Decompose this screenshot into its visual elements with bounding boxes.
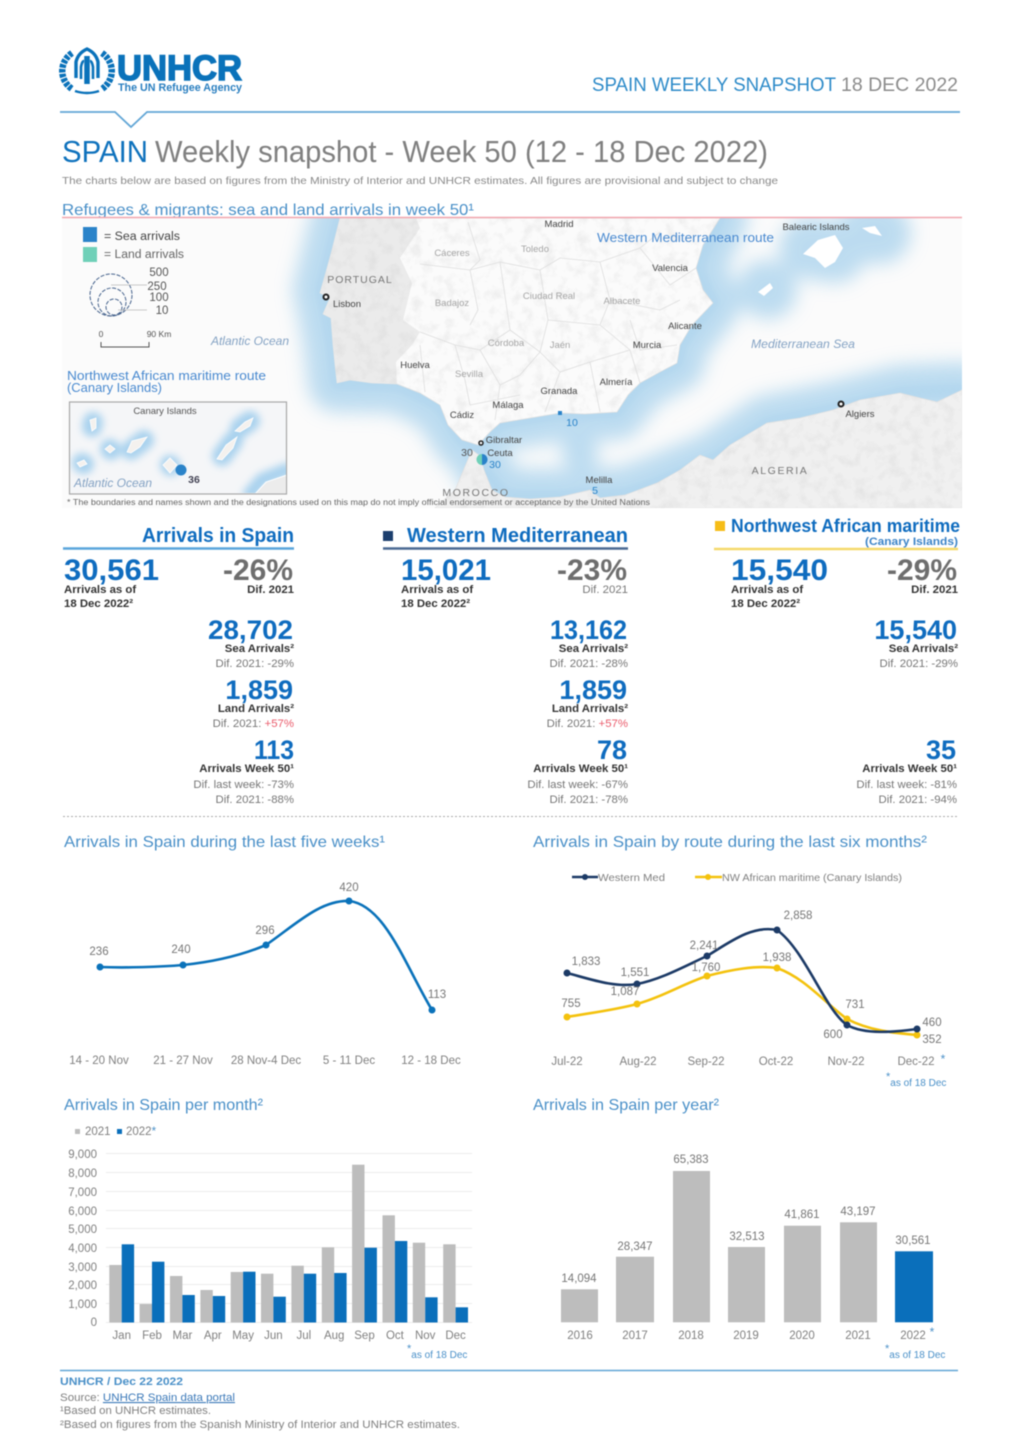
panel: map: 30 xyxy=(461,447,473,459)
panel: western mediterranean: Dif. 2021: -78% xyxy=(549,794,628,806)
panel: map: Badajoz xyxy=(435,298,469,309)
panel: map: Málaga xyxy=(492,400,524,411)
legend: circle sizes: 100 xyxy=(149,292,169,304)
line: NW African xyxy=(564,964,920,1038)
map scale: 0 xyxy=(99,329,104,339)
chart: by route last six months: 2,241 xyxy=(690,940,718,952)
inset: Canary Islands: Atlantic Ocean xyxy=(73,476,152,490)
x axis: Feb xyxy=(142,1330,162,1342)
panel: northwest african maritime: Arrivals as of xyxy=(731,584,803,596)
panel: western mediterranean: Dif. last week: -67% xyxy=(527,779,628,791)
heading: Arrivals in Spain per year² xyxy=(533,1097,720,1114)
panel: arrivals in Spain: Dif. 2021: -88% xyxy=(215,794,294,806)
chart: last five weeks: 5 - 11 Dec xyxy=(323,1055,375,1067)
line xyxy=(96,898,436,1014)
panel: map: Ciudad Real xyxy=(523,291,575,302)
panel: arrivals in Spain: 1,859 xyxy=(225,675,293,705)
chart: last five weeks: 240 xyxy=(171,944,191,956)
province borders xyxy=(420,222,696,420)
panel: northwest african maritime: Arrivals Week 50¹ xyxy=(862,763,957,775)
chart: by route last six months: Dec-22 xyxy=(897,1056,935,1068)
chart: by route last six months: 600 xyxy=(823,1029,843,1041)
footer: Source: UNHCR Spain data portal xyxy=(60,1392,235,1404)
header date line: 18 DEC 2022 xyxy=(841,74,958,96)
y axis: 6,000 xyxy=(68,1206,97,1218)
legend: circle sizes: 10 xyxy=(156,305,168,317)
panel: map xyxy=(62,218,962,508)
panel: northwest african maritime: Northwest African maritime xyxy=(731,516,960,536)
chart: last five weeks: 296 xyxy=(255,925,275,937)
header date line: SPAIN WEEKLY SNAPSHOT xyxy=(592,74,836,96)
chart: last five weeks: 12 - 18 Dec xyxy=(401,1055,461,1067)
panel: northwest african maritime: Dif. 2021: -29% xyxy=(879,658,958,670)
x axis: 2019 xyxy=(733,1330,759,1342)
map top rule xyxy=(62,216,962,218)
chart: by route last six months: 460 xyxy=(922,1017,942,1029)
panel: map: PORTUGAL xyxy=(327,274,393,286)
heading: Arrivals in Spain per month² xyxy=(64,1097,264,1114)
note: as of 18 Dec xyxy=(890,1078,946,1089)
panel: map: Toledo xyxy=(521,244,549,255)
panel: arrivals in Spain: 18 Dec 2022² xyxy=(64,598,133,610)
x axis: 2018 xyxy=(678,1330,704,1342)
x axis: Oct xyxy=(386,1330,405,1342)
x axis: 2016 xyxy=(567,1330,593,1342)
panel: western mediterranean: 1,859 xyxy=(559,675,627,705)
chart: by route last six months: Oct-22 xyxy=(759,1056,793,1068)
panel: map: Córdoba xyxy=(488,338,525,349)
chart: last five weeks: 21 - 27 Nov xyxy=(153,1055,213,1067)
legend: NW African maritime (Canary Islands) xyxy=(722,873,902,884)
chart: last five weeks: 28 Nov-4 Dec xyxy=(231,1055,301,1067)
y axis: 5,000 xyxy=(68,1224,97,1236)
panel: western mediterranean: -23% xyxy=(557,554,627,587)
panel: western mediterranean xyxy=(383,525,628,806)
heading: map section: Refugees & migrants: sea and land arrivals in week 50¹ xyxy=(62,202,474,219)
y axis xyxy=(68,1149,97,1329)
x axis: Jun xyxy=(264,1330,283,1342)
gridlines xyxy=(106,1154,472,1322)
panel: map: Almería xyxy=(600,377,633,388)
panel: map: MOROCCO xyxy=(442,487,510,499)
chart: last five weeks: 113 xyxy=(428,989,446,1001)
note: * xyxy=(885,1343,890,1355)
route label: northwest african xyxy=(67,369,266,395)
chart: by route last six months: 2,858 xyxy=(784,910,812,922)
panel: map: Valencia xyxy=(652,263,689,274)
land: Portugal xyxy=(320,218,420,384)
chart: last five weeks: 14 - 20 Nov xyxy=(69,1055,129,1067)
footer: ¹Based on UNHCR estimates. xyxy=(60,1405,211,1417)
note: * xyxy=(886,1071,891,1083)
panel: western mediterranean: Arrivals Week 50¹ xyxy=(533,763,628,775)
note: as of 18 Dec xyxy=(411,1350,467,1361)
y axis: 2,000 xyxy=(68,1280,97,1292)
x axis: 2020 xyxy=(789,1330,815,1342)
chart: by route last six months: Sep-22 xyxy=(687,1056,725,1068)
inset: Canary Islands: 36 xyxy=(188,474,200,486)
panel: map: Algiers xyxy=(845,409,875,420)
y axis: 4,000 xyxy=(68,1243,97,1255)
y axis: 7,000 xyxy=(68,1187,97,1199)
x axis xyxy=(112,1330,466,1342)
panel: map: 30 xyxy=(489,459,501,471)
panel: western mediterranean: Land Arrivals² xyxy=(552,703,628,715)
legend xyxy=(75,1126,157,1138)
x axis: Apr xyxy=(204,1330,222,1342)
x axis: Sep xyxy=(354,1330,375,1342)
chart: by route last six months: 1,551 xyxy=(621,967,649,979)
values: 41,861 xyxy=(784,1209,820,1221)
x axis: Nov xyxy=(415,1330,436,1342)
values: 14,094 xyxy=(561,1273,597,1285)
inset: Canary Islands xyxy=(70,402,287,494)
x axis: 2017 xyxy=(622,1330,648,1342)
legend xyxy=(572,873,902,884)
panel: arrivals in Spain: Dif. 2021: +57% xyxy=(213,718,294,730)
x axis: Jan xyxy=(112,1330,131,1342)
panel: northwest african maritime: 18 Dec 2022² xyxy=(731,598,800,610)
x axis xyxy=(567,1325,935,1342)
chart: last five weeks: 236 xyxy=(89,946,109,958)
icon: yellow square xyxy=(715,521,725,531)
chart: per month xyxy=(64,1097,472,1361)
panel: western mediterranean: 18 Dec 2022² xyxy=(401,598,470,610)
route label: northwest african: Northwest African maritime route xyxy=(67,369,266,383)
panel: arrivals in Spain: Arrivals in Spain xyxy=(142,525,294,547)
panel: map: 10 xyxy=(566,417,578,429)
panel: map: ALGERIA xyxy=(752,465,808,477)
panel: map: Jaén xyxy=(550,340,570,351)
panel: map: Cádiz xyxy=(450,410,474,421)
y axis: 0 xyxy=(91,1317,97,1329)
chart: last five weeks: 420 xyxy=(339,882,359,894)
legend: circle sizes xyxy=(90,267,169,317)
x axis: 2022 xyxy=(900,1330,926,1342)
chart: by route last six months: 1,938 xyxy=(763,952,791,964)
panel: northwest african maritime: Sea Arrivals² xyxy=(889,643,958,655)
legend: circle sizes: 250 xyxy=(147,281,167,293)
panel: arrivals in Spain: Arrivals Week 50¹ xyxy=(199,763,294,775)
chart: by route last six months: 755 xyxy=(561,998,581,1010)
icon: navy square xyxy=(383,531,393,541)
values: 32,513 xyxy=(729,1231,765,1243)
panel: northwest african maritime: 15,540 xyxy=(731,554,828,587)
legend: sea and land arrivals: = Land arrivals xyxy=(104,249,184,261)
inset: Canary Islands: Canary Islands xyxy=(133,406,197,417)
Mediterranean and place labels: Cáceres xyxy=(434,248,470,259)
legend: sea and land arrivals: = Sea arrivals xyxy=(104,231,180,243)
panel: arrivals in Spain: Dif. 2021: -29% xyxy=(215,658,294,670)
UNHCR logo: The UN Refugee Agency xyxy=(118,82,243,94)
panel: western mediterranean: Arrivals as of xyxy=(401,584,473,596)
chart: last five weeks xyxy=(64,834,461,1067)
panel: map: Mediterranean Sea xyxy=(751,337,855,351)
y axis: 9,000 xyxy=(68,1149,97,1161)
panel: western mediterranean: Western Mediterranean xyxy=(407,525,628,547)
panel: northwest african maritime: 35 xyxy=(926,735,956,765)
panel: map: Huelva xyxy=(400,360,430,371)
panel: map: Atlantic Ocean xyxy=(210,334,289,348)
panel: arrivals in Spain: Dif. 2021 xyxy=(247,584,295,596)
panel: western mediterranean: Dif. 2021 xyxy=(582,584,628,596)
x axis: 2021 xyxy=(845,1330,871,1342)
x axis: Dec xyxy=(445,1330,466,1342)
panel: map: Sevilla xyxy=(455,369,484,380)
panel: map: Alicante xyxy=(668,321,702,332)
panel: northwest african maritime: Dif. last week: -81% xyxy=(856,779,957,791)
bars: 2021 xyxy=(109,1165,456,1322)
panel: western mediterranean: 13,162 xyxy=(550,615,627,645)
x axis: Aug xyxy=(324,1330,344,1342)
icon: UNHCR emblem xyxy=(62,49,112,93)
city markers xyxy=(324,294,328,300)
land: Balearic Islands xyxy=(758,226,882,296)
chart: by route last six months: 1,833 xyxy=(572,956,600,968)
y axis: 1,000 xyxy=(68,1299,97,1311)
panel: map: Murcia xyxy=(633,340,662,351)
panel: northwest african maritime: Dif. 2021 xyxy=(911,584,959,596)
subtitle: The charts below are based on figures from the Ministry of Interior and UNHCR estimates. All figures are provisional and subject to change xyxy=(62,175,778,187)
panel: map: Gibraltar xyxy=(486,435,522,446)
values: 28,347 xyxy=(617,1241,653,1253)
panel: arrivals in Spain: -26% xyxy=(223,554,293,587)
land: Iberian peninsula xyxy=(320,218,720,445)
panel: map: Balearic Islands xyxy=(782,222,850,233)
title: Weekly snapshot - Week 50 (12 - 18 Dec 2022) xyxy=(155,134,768,169)
panel: arrivals in Spain: 28,702 xyxy=(208,615,293,645)
route label: northwest african: (Canary Islands) xyxy=(67,381,162,395)
panel: western mediterranean: Dif. 2021: +57% xyxy=(547,718,628,730)
footer: UNHCR / Dec 22 2022 xyxy=(60,1376,183,1388)
heading: Arrivals in Spain during the last five weeks¹ xyxy=(64,834,385,851)
panel: northwest african maritime: -29% xyxy=(887,554,957,587)
panel: arrivals in Spain: 113 xyxy=(254,735,294,765)
values: 30,561 xyxy=(895,1235,931,1247)
heading: Arrivals in Spain by route during the last six months² xyxy=(533,834,928,851)
route label: western mediterranean: Western Mediterranean route xyxy=(597,231,774,245)
panel: map: Melilla xyxy=(586,475,613,486)
panel: map: Lisbon xyxy=(333,299,361,310)
chart: by route last six months: 1,087 xyxy=(611,986,639,998)
header date line xyxy=(592,74,958,96)
legend: circle sizes: 500 xyxy=(149,267,169,279)
panel: western mediterranean: 15,021 xyxy=(401,554,491,587)
bars: 2022 xyxy=(122,1241,468,1322)
footer: ²Based on figures from the Spanish Ministry of Interior and UNHCR estimates. xyxy=(60,1419,460,1431)
chart: by route last six months: 352 xyxy=(922,1034,942,1046)
panel: arrivals in Spain: Dif. last week: -73% xyxy=(193,779,294,791)
land: hillshade texture xyxy=(320,218,962,508)
chart: by route last six months: 731 xyxy=(845,999,865,1011)
chart: per year xyxy=(533,1097,945,1361)
panel: arrivals in Spain: 30,561 xyxy=(64,554,159,587)
x axis: May xyxy=(232,1330,254,1342)
header rule with notch xyxy=(60,112,960,127)
arrival markers xyxy=(558,411,562,415)
legend: sea and land arrivals xyxy=(83,227,184,262)
legend: Western Med xyxy=(598,873,665,884)
x axis: Mar xyxy=(172,1330,192,1342)
land: North Africa xyxy=(435,390,962,508)
UNHCR logo: UNHCR xyxy=(117,49,242,88)
UNHCR logo xyxy=(62,49,243,94)
panel: western mediterranean: 78 xyxy=(597,735,627,765)
panel: map: Ceuta xyxy=(487,448,513,459)
panel: map: 5 xyxy=(592,485,598,497)
footer xyxy=(60,1376,460,1431)
panel: northwest african maritime: 15,540 xyxy=(874,615,957,645)
chart: by route last six months: Jul-22 xyxy=(551,1056,583,1068)
panel: arrivals in Spain: Land Arrivals² xyxy=(218,703,294,715)
panel: western mediterranean: Dif. 2021: -28% xyxy=(549,658,628,670)
map disclaimer: * The boundaries and names shown and the designations used on this map do not imply official endorsement or acceptance by the United Nations xyxy=(67,498,650,507)
chart: by route last six months: 1,760 xyxy=(692,962,720,974)
panel: northwest african maritime: (Canary Islands) xyxy=(865,536,958,548)
values: 43,197 xyxy=(840,1206,876,1218)
panel: map: Granada xyxy=(541,386,578,397)
bars xyxy=(561,1171,933,1322)
legend: 2022* xyxy=(126,1126,157,1138)
chart: by route last six months: Nov-22 xyxy=(827,1056,865,1068)
panel: western mediterranean: Sea Arrivals² xyxy=(559,643,628,655)
panel: arrivals in Spain: Arrivals as of xyxy=(64,584,136,596)
y axis: 3,000 xyxy=(68,1262,97,1274)
title: SPAIN xyxy=(62,134,148,169)
panel: northwest african maritime xyxy=(714,516,960,806)
values xyxy=(561,1154,931,1285)
panel: arrivals in Spain: Sea Arrivals² xyxy=(225,643,294,655)
chart: by route last six months: Aug-22 xyxy=(619,1056,657,1068)
chart: by route last six months xyxy=(533,834,946,1089)
panel: map: Albacete xyxy=(604,296,640,307)
panel: northwest african maritime: Dif. 2021: -94% xyxy=(878,794,957,806)
note: as of 18 Dec xyxy=(889,1350,945,1361)
x axis: Jul xyxy=(296,1330,311,1342)
panel: map: Madrid xyxy=(544,219,574,230)
legend: 2021 xyxy=(85,1126,111,1138)
panel: arrivals in Spain xyxy=(63,525,295,806)
x axis: * xyxy=(930,1325,935,1339)
map scale xyxy=(99,329,171,347)
note: * xyxy=(407,1343,412,1355)
coastal buffers xyxy=(322,218,962,497)
values: 65,383 xyxy=(673,1154,709,1166)
chart: by route last six months: * xyxy=(941,1052,946,1066)
line: Western Med xyxy=(564,926,920,1032)
map scale: 90 Km xyxy=(147,329,171,339)
y axis: 8,000 xyxy=(68,1168,97,1180)
